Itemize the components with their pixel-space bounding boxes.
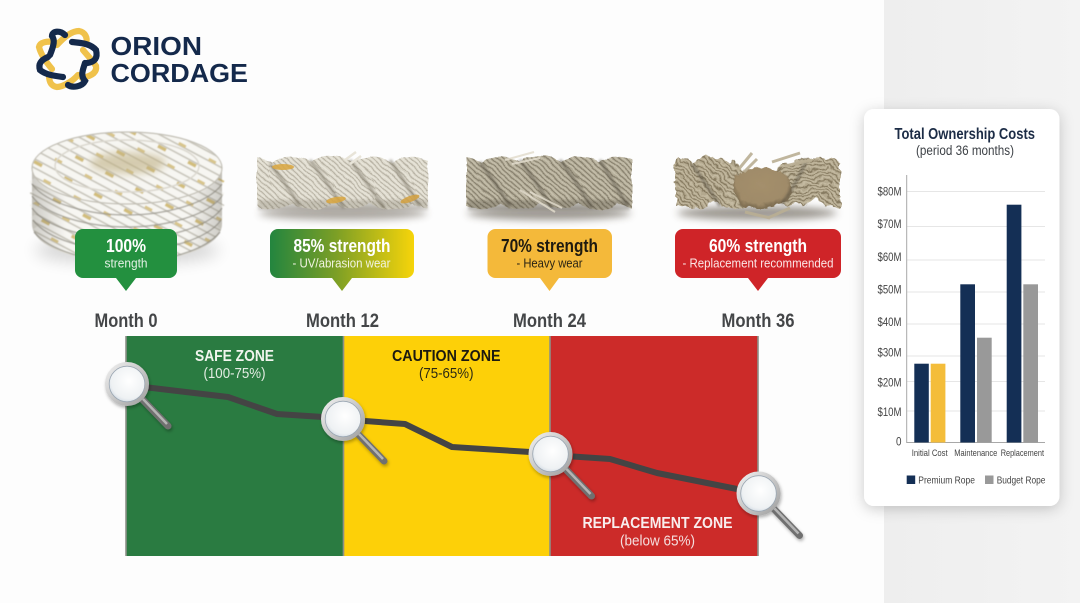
y axis labels: $60M: [878, 252, 902, 264]
category labels: Initial Cost: [912, 448, 948, 459]
y axis labels: $70M: [878, 219, 902, 231]
zone chart: [107, 336, 800, 556]
callout: 70% strength: 70% strength: [501, 236, 598, 256]
right side band: [884, 0, 1080, 603]
callout: 85% strength: 85% strength: [294, 236, 390, 256]
rope image: new coil, month 0: [32, 132, 222, 264]
icon: magnifier month 12: [323, 399, 384, 461]
replacement zone: [550, 336, 758, 556]
safe zone: (100-75%): [204, 365, 266, 382]
y axis labels: $50M: [878, 284, 902, 296]
y axis labels: 0: [896, 436, 902, 448]
callout: 70% strength: [488, 229, 612, 291]
wordmark: ORION: [110, 31, 202, 61]
caution zone: (75-65%): [419, 365, 474, 382]
y axis labels: $80M: [878, 186, 902, 198]
strength decline line: [148, 388, 737, 489]
replacement zone: (below 65%): [620, 532, 695, 550]
legend: [907, 474, 1046, 486]
bars: initial cost: [914, 364, 945, 442]
category labels: [912, 448, 1044, 459]
icon: magnifier month 0: [107, 364, 168, 426]
month labels: Month 12: [306, 311, 379, 332]
replacement zone: REPLACEMENT ZONE: [582, 515, 733, 532]
month labels: Month 36: [722, 311, 794, 332]
bars: replacement: [1007, 205, 1038, 442]
safe zone: SAFE ZONE: [195, 348, 274, 365]
rope image: 85% strand, month 12: [256, 151, 430, 225]
month labels: Month 24: [513, 311, 586, 332]
y axis labels: [878, 186, 902, 448]
month labels: Month 0: [94, 311, 158, 332]
category labels: Replacement: [1001, 448, 1044, 459]
bar chart: [878, 175, 1045, 459]
rope image: 60% frayed strand, month 36: [673, 152, 842, 226]
y axis labels: $20M: [878, 378, 902, 390]
y axis labels: $40M: [878, 317, 902, 329]
callout: 60% strength: 60% strength: [709, 236, 807, 256]
bars: maintenance: [960, 284, 992, 442]
category labels: Maintenance: [954, 448, 997, 459]
month labels: [94, 311, 794, 332]
legend: Budget Rope: [997, 474, 1046, 486]
wordmark: [110, 31, 248, 88]
panel: total ownership costs: [864, 109, 1060, 506]
callout: 100% strength: [75, 229, 177, 291]
callout: 85% strength: [270, 229, 414, 291]
callout: 100% strength: strength: [104, 256, 148, 270]
icon: interlocked rope knot: [39, 31, 97, 87]
icon: magnifier month 24: [530, 434, 592, 496]
icon: magnifier month 36: [738, 474, 800, 536]
caution zone: CAUTION ZONE: [392, 348, 501, 365]
callout: 85% strength: - UV/abrasion wear: [292, 256, 391, 270]
callout: 60% strength: - Replacement recommended: [682, 256, 834, 270]
panel heading: [894, 126, 1035, 158]
rope image: 70% strand, month 24: [464, 151, 634, 226]
y axis labels: $30M: [878, 348, 902, 360]
wordmark: CORDAGE: [110, 58, 248, 88]
callout: 70% strength: - Heavy wear: [516, 256, 583, 270]
caution zone: [344, 336, 550, 556]
safe zone: [126, 336, 344, 556]
callout: 100% strength: 100%: [106, 236, 146, 256]
logo: [39, 31, 248, 88]
panel heading: Total Ownership Costs: [894, 126, 1035, 143]
panel heading: (period 36 months): [916, 143, 1014, 158]
y axis labels: $10M: [878, 407, 902, 419]
legend: Premium Rope: [918, 474, 975, 486]
callout: 60% strength: [675, 229, 841, 291]
